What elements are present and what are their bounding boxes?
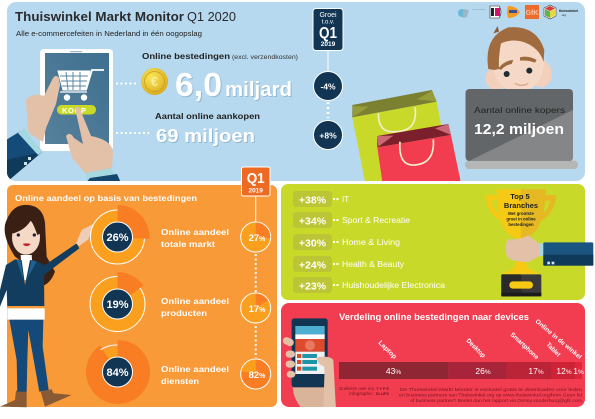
segment: in store 1%: 1% (573, 366, 584, 376)
sector row: home: +30% (299, 238, 327, 250)
label: services: diensten (161, 376, 199, 386)
icon: trophy held by hand (486, 189, 593, 296)
dotted connector: spending (116, 82, 138, 84)
small donut: 17%: 17% (249, 304, 266, 315)
segment: laptop 43% (339, 362, 448, 379)
sector row: sport: +34% (299, 216, 327, 228)
badge: Q1 2019 (242, 167, 270, 196)
label: total market: Online aandeel (161, 227, 229, 237)
footnote: infographic source (339, 386, 374, 396)
icon: partner logos (458, 5, 578, 19)
sector row: health (293, 256, 404, 272)
footnote: infographic source: infographic: (349, 391, 374, 396)
label: products: Online aandeel (161, 296, 229, 306)
small donut: 27% (241, 222, 271, 252)
logo: designer (376, 386, 389, 396)
value: 12,2 miljoen: 12,2 miljoen (474, 121, 564, 138)
sector row: IT: +38% (299, 194, 327, 206)
sector row: electronics: +23% (299, 280, 327, 292)
sector row: sport (293, 212, 411, 228)
donut: total market 26%: 26% (106, 232, 129, 244)
badge: Q1 2019: 2019 (248, 188, 263, 194)
footnote: download info: of business partner? Bestel dan het rapport via Denny.vanderburg@gfk.com (410, 398, 582, 404)
sector row: health: Health & Beauty (342, 260, 404, 269)
label: total market: totale markt (161, 239, 215, 249)
badge: Q1 2019: Q1 (247, 170, 265, 187)
segment: smartphone 17%: 17% (528, 366, 544, 376)
sector row: health: +24% (299, 260, 327, 272)
badge: growth vs Q1 2019 (313, 8, 343, 72)
value: 69 miljoen: 69 miljoen (156, 126, 255, 146)
donut: total market 26% (90, 205, 149, 264)
stacked bar: devices (339, 362, 584, 379)
badge: growth vs Q1 2019: t.o.v. (322, 20, 335, 26)
footnote: download info (399, 387, 582, 404)
footnote: download info: en business partners van Thuiswinkel.org op www.thuiswinkel.org/hnm Geen lid (399, 392, 582, 398)
segment: desktop 26% (448, 362, 507, 379)
illustration: woman pointing (0, 205, 93, 407)
connector line: badge (255, 196, 257, 222)
growth: spending -4%: -4% (320, 82, 336, 92)
value: 6,0 miljard (175, 66, 292, 103)
label: products: producten (161, 308, 207, 318)
icon: shopping bags (352, 90, 461, 182)
small donut: 82% (241, 359, 271, 389)
sector row: home: Home & Living (342, 238, 400, 247)
badge: growth vs Q1 2019: Q1 (319, 25, 337, 42)
sector row: IT: IT (342, 195, 349, 204)
small donut: 82%: 82% (249, 370, 266, 381)
logo: designer: ELLIPS (376, 391, 389, 396)
heading: devices: Verdeling online bestedingen naar devices (339, 312, 529, 322)
sector row: electronics (293, 277, 446, 293)
label: online purchases: Aantal online aankopen (155, 111, 260, 121)
title: Thuiswinkel Markt Monitor (15, 10, 184, 24)
icon: euro coin: € (151, 74, 158, 89)
label: online spending: Online bestedingen (142, 51, 230, 61)
sector row: IT (293, 191, 349, 207)
trophy text: Top 5 (510, 192, 530, 201)
donut: products 19% (90, 272, 145, 332)
trophy text: groei in online (506, 216, 536, 222)
segment: tablet 12%: 12% (556, 366, 572, 376)
footnote: download info: De Thuiswinkel Markt Monitor is exclusief gratis te downloaden voor leden (400, 387, 582, 393)
rotated device labels: Tablet (545, 341, 562, 359)
icon: tablet with shopping cart and hands (6, 49, 122, 185)
label: total market (161, 227, 229, 249)
icon: tablet with shopping cart and hands: KOOP (62, 106, 86, 115)
subtitle: Alle e-commercefeiten in Nederland in één oogopslag (16, 31, 202, 38)
segment: laptop 43%: 43% (386, 366, 401, 376)
segment: in store 1% (573, 362, 584, 379)
trophy text: bestedingen (508, 222, 534, 227)
rotated device labels (377, 318, 583, 361)
dotted connector: 2019 (255, 254, 257, 358)
sector row: sport: Sport & Recreatie (342, 216, 411, 225)
panel: online share (0, 167, 277, 407)
rotated device labels: Smartphone (509, 331, 540, 361)
growth: spending -4% (314, 72, 342, 100)
dotted connector: purchases (116, 132, 149, 134)
trophy text (504, 192, 538, 227)
growth: purchases +8% (314, 120, 342, 150)
donut: services 84% (86, 340, 150, 404)
value: 6,0 miljard: miljard (225, 79, 292, 101)
badge: growth vs Q1 2019: 2019 (321, 41, 336, 48)
icon: partner logos: thuiswinkel (559, 9, 578, 13)
icon: boy behind laptop (486, 26, 552, 91)
label: excl shipping: (excl. verzendkosten) (232, 55, 298, 61)
segment: smartphone 17% (507, 362, 552, 379)
laptop with buyers count (465, 89, 578, 169)
panel: overview (6, 2, 585, 185)
panel: top 5 sectors (281, 184, 593, 300)
icon: partner logos: .org (561, 13, 567, 17)
panel: spend by device (281, 303, 585, 410)
icon: hand holding smartphone (282, 318, 336, 410)
segment: desktop 26%: 26% (475, 366, 491, 376)
value: 6,0 miljard: 6,0 (175, 66, 222, 103)
sector row: electronics: Huishoudelijke Electronica (342, 281, 446, 290)
donut: services 84%: 84% (106, 367, 129, 379)
badge: growth vs Q1 2019: Groei (319, 12, 337, 19)
dotted connector: growth (327, 102, 329, 118)
heading: online share: Online aandeel op basis van bestedingen (15, 193, 197, 203)
label: products (161, 296, 229, 318)
small donut: 27%: 27% (249, 233, 266, 244)
rotated device labels: Desktop (465, 337, 487, 359)
trophy text: Branches (504, 201, 538, 210)
footnote: infographic source: Grafieken over erp (339, 386, 374, 391)
growth: purchases +8%: +8% (319, 130, 337, 140)
label: services (161, 364, 229, 386)
small donut: 17% (241, 293, 271, 323)
trophy text: Met grootste (508, 211, 534, 216)
logo: designer: TYPE (376, 386, 389, 391)
icon: euro coin (141, 68, 168, 95)
label: services: Online aandeel (161, 364, 229, 374)
rotated device labels: Online in de winkel (534, 318, 583, 361)
rotated device labels: Laptop (377, 339, 398, 361)
donut: products 19%: 19% (106, 299, 129, 311)
label: online buyers: Aantal online kopers (474, 105, 565, 115)
title period: Q1 2020 (187, 10, 236, 24)
sector row: home (293, 234, 400, 250)
segment: tablet 12% (552, 362, 575, 379)
icon: partner logos: GfK (526, 10, 538, 17)
